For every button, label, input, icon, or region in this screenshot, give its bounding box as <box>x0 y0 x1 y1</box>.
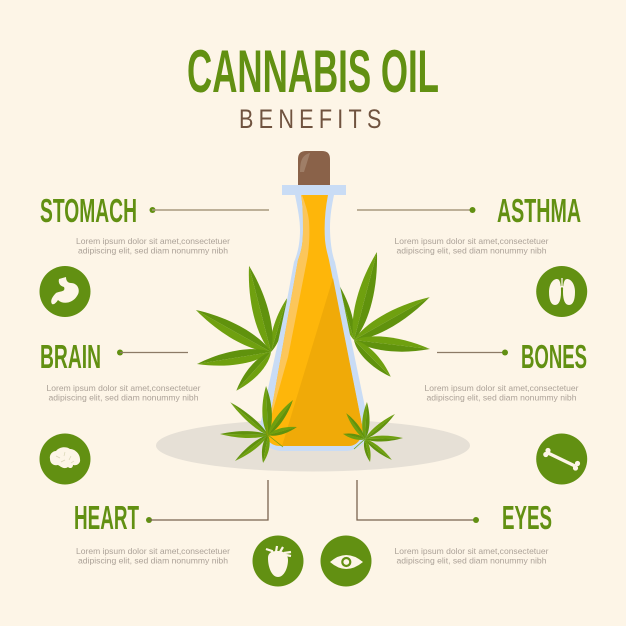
stomach section: STOMACH <box>40 192 137 229</box>
eyes section <box>357 480 552 566</box>
icon: bone <box>536 434 587 484</box>
bones section: Lorem ipsum dolor sit amet,consectetuer <box>424 383 579 393</box>
eyes section: adipiscing elit, sed diam nonummy nibh <box>396 556 547 566</box>
large left leaf <box>192 264 291 394</box>
brain section: Lorem ipsum dolor sit amet,consectetuer <box>46 383 201 393</box>
brain section <box>40 338 201 402</box>
oil highlight <box>268 195 309 428</box>
subtitle: BENEFITS <box>239 105 381 135</box>
oil bottle <box>260 151 368 451</box>
brain section: BRAIN <box>40 338 101 375</box>
bones section: adipiscing elit, sed diam nonummy nibh <box>426 392 577 402</box>
oil shade <box>282 278 362 446</box>
table shadow ellipse <box>156 420 470 472</box>
icon: lungs <box>536 266 587 317</box>
glass <box>260 195 368 451</box>
icon: eye <box>320 536 372 586</box>
icon: stomach <box>40 266 90 317</box>
asthma section <box>357 192 581 256</box>
stomach section <box>40 192 269 256</box>
icon: brain <box>40 434 90 484</box>
heart section: Lorem ipsum dolor sit amet,consectetuer <box>76 546 230 556</box>
asthma section: adipiscing elit, sed diam nonummy nibh <box>396 246 547 256</box>
stomach section: adipiscing elit, sed diam nonummy nibh <box>78 246 228 256</box>
small right leaf <box>342 402 403 463</box>
asthma section: Lorem ipsum dolor sit amet,consectetuer <box>394 236 549 246</box>
icon: heart <box>252 536 304 586</box>
cork <box>298 151 330 185</box>
small left leaf <box>220 386 298 464</box>
heart section: adipiscing elit, sed diam nonummy nibh <box>78 556 228 566</box>
title: CANNABIS OIL <box>187 38 439 105</box>
oil <box>266 195 362 446</box>
heart section: HEART <box>74 499 139 536</box>
eyes section: Lorem ipsum dolor sit amet,consectetuer <box>394 546 549 556</box>
eyes section: EYES <box>502 499 552 536</box>
stomach section: Lorem ipsum dolor sit amet,consectetuer <box>76 236 230 246</box>
brain section: adipiscing elit, sed diam nonummy nibh <box>48 392 199 402</box>
heart section <box>74 480 268 566</box>
large right leaf <box>333 250 433 381</box>
collar <box>282 185 346 195</box>
bones section <box>424 338 587 402</box>
